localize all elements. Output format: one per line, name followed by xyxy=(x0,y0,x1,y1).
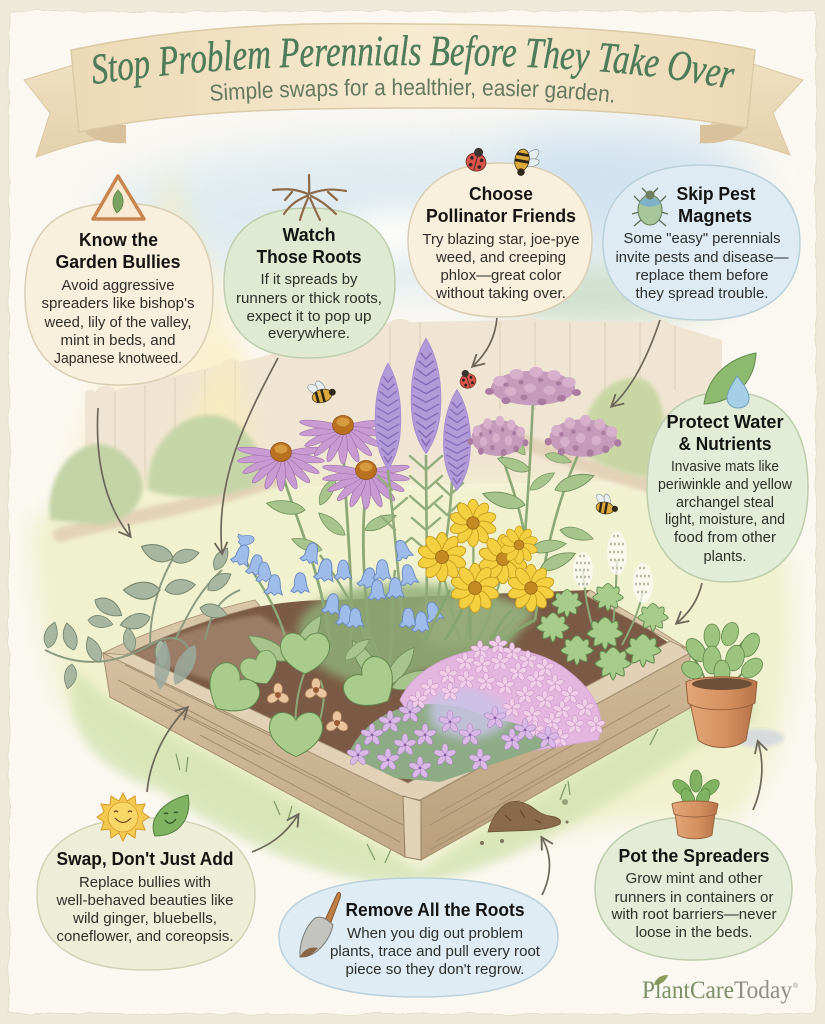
icon: trowel xyxy=(300,892,341,957)
panel: Protect Water and Nutrients: Invasive mats like xyxy=(671,459,779,475)
plant: coreopsis xyxy=(417,499,555,640)
panel: Watch Those Roots: everywhere. xyxy=(268,326,350,342)
background lawn xyxy=(30,476,793,870)
plant: blazing star spikes xyxy=(375,338,470,630)
panel: Pot the Spreaders: Grow mint and other xyxy=(626,871,763,887)
left fold xyxy=(80,120,126,143)
raised bed xyxy=(103,590,690,860)
icon: small potted plant xyxy=(670,770,722,839)
logo: PlantCareToday: ® xyxy=(793,982,799,990)
logo: PlantCareToday: PlantCareToday xyxy=(642,977,792,1004)
right fold xyxy=(700,120,747,143)
title: Stop Problem Perennials Before They Take Over xyxy=(93,35,735,88)
panel: Pot the Spreaders: runners in containers or xyxy=(614,890,774,906)
panel: Protect Water and Nutrients: & Nutrients xyxy=(678,434,772,454)
subtitle: Simple swaps for a healthier, easier garden. xyxy=(210,78,614,104)
panel: Swap, Don't Just Add: well-behaved beauties like xyxy=(55,893,233,909)
panel: Pot the Spreaders: Pot the Spreaders xyxy=(618,846,770,866)
panel: Swap, Don't Just Add: wild ginger, bluebells, xyxy=(72,911,217,927)
panel: Choose Pollinator Friends xyxy=(408,144,592,317)
panel: Choose Pollinator Friends: Try blazing star, joe-pye xyxy=(422,232,580,248)
icon: warning triangle with leaf xyxy=(93,176,144,219)
panel: Know the Garden Bullies: weed, lily of the valley, xyxy=(43,315,191,331)
panel: Protect Water and Nutrients: archangel steal xyxy=(676,495,774,511)
grass around bed xyxy=(71,670,784,885)
main band xyxy=(71,23,755,132)
icon: smiling leaf xyxy=(153,795,189,836)
arrows xyxy=(97,318,762,895)
icon: beetle xyxy=(632,188,668,226)
panel: Know the Garden Bullies xyxy=(25,176,213,385)
icon: smiling sun xyxy=(97,793,149,841)
insects in garden xyxy=(304,367,620,516)
panel: Remove All the Roots: piece so they don't regrow. xyxy=(346,962,524,978)
panel: Watch Those Roots: expect it to pop up xyxy=(246,309,372,325)
watercolor sky xyxy=(60,125,760,500)
background shrubs xyxy=(49,378,665,525)
panel: Protect Water and Nutrients: Protect Water xyxy=(666,412,784,432)
plant: bluebells xyxy=(230,532,444,694)
soil xyxy=(125,590,672,785)
panel: Skip Pest Magnets: Magnets xyxy=(678,206,752,226)
panel: Swap, Don't Just Add: Swap, Don't Just Add xyxy=(56,849,234,869)
panel: Choose Pollinator Friends: Choose xyxy=(469,184,533,204)
right face xyxy=(421,653,690,860)
panel: Remove All the Roots: Remove All the Roots xyxy=(346,900,524,920)
panel: Skip Pest Magnets: Skip Pest xyxy=(676,184,756,204)
fence xyxy=(85,317,722,500)
right tail xyxy=(700,63,803,155)
panel: Know the Garden Bullies: Avoid aggressive xyxy=(62,278,174,294)
panel: Protect Water and Nutrients xyxy=(647,353,808,582)
rim top xyxy=(103,640,690,800)
panel: Choose Pollinator Friends: phlox—great color xyxy=(440,268,562,284)
panel: Skip Pest Magnets: invite pests and disease— xyxy=(616,250,789,266)
plant: foamflower xyxy=(537,531,668,680)
panel: Know the Garden Bullies: Know the xyxy=(79,230,158,250)
panel: Swap, Don't Just Add: coneflower, and coreopsis. xyxy=(56,929,233,945)
panel: Watch Those Roots: runners or thick roots, xyxy=(236,291,382,307)
panel: Swap, Don't Just Add xyxy=(37,793,255,970)
icon: roots xyxy=(273,175,346,220)
panel: Know the Garden Bullies: spreaders like bishop's xyxy=(42,296,194,312)
plant: wild ginger xyxy=(196,633,407,757)
dirt mound xyxy=(480,799,568,845)
terracotta pot with mint xyxy=(678,620,766,748)
panel: Watch Those Roots: If it spreads by xyxy=(260,272,358,288)
icon: ladybug xyxy=(464,145,489,173)
panel: Pot the Spreaders xyxy=(595,770,792,960)
panel: Watch Those Roots xyxy=(224,175,395,358)
soil path band xyxy=(60,440,670,535)
panel: Know the Garden Bullies: Garden Bullies xyxy=(56,252,180,272)
panel: Know the Garden Bullies: mint in beds, and xyxy=(60,333,176,349)
panel: Choose Pollinator Friends: Pollinator Friends xyxy=(426,206,576,226)
panel: Skip Pest Magnets: they spread trouble. xyxy=(636,286,768,302)
panel: Pot the Spreaders: loose in the beds. xyxy=(636,925,752,941)
panel: Know the Garden Bullies: Japanese knotweed. xyxy=(54,351,182,367)
panel: Protect Water and Nutrients: light, moisture, and xyxy=(665,512,785,528)
panel: Watch Those Roots: Watch xyxy=(282,225,336,245)
left tail xyxy=(24,63,126,157)
icon: leaf and water drop xyxy=(704,353,756,408)
plant: coneflowers xyxy=(237,416,410,660)
banner ribbon xyxy=(23,22,804,158)
foliage mass behind plants xyxy=(297,583,535,683)
icon: bee xyxy=(512,144,543,179)
panel: Remove All the Roots: plants, trace and pull every root xyxy=(330,944,540,960)
panel: Remove All the Roots: When you dig out problem xyxy=(347,926,523,942)
plant: creeping phlox xyxy=(346,636,606,782)
panel: Pot the Spreaders: with root barriers—never xyxy=(610,907,777,923)
panel: Choose Pollinator Friends: weed, and creeping xyxy=(435,250,566,266)
back rim xyxy=(103,590,690,655)
panel: Remove All the Roots xyxy=(279,878,558,997)
panel: Choose Pollinator Friends: without taking over. xyxy=(435,286,566,302)
left face xyxy=(103,653,405,857)
panel: Protect Water and Nutrients: plants. xyxy=(704,549,746,565)
plant: joe-pye weed xyxy=(468,367,621,620)
plant: invasive weed xyxy=(41,540,240,690)
panel: Protect Water and Nutrients: food from other xyxy=(674,530,776,546)
panel: Swap, Don't Just Add: Replace bullies with xyxy=(79,875,211,891)
panel: Skip Pest Magnets xyxy=(603,165,800,320)
panel: Skip Pest Magnets: replace them before xyxy=(636,268,768,284)
front post xyxy=(403,796,421,860)
panel: Skip Pest Magnets: Some "easy" perennials xyxy=(624,231,780,247)
panel: Watch Those Roots: Those Roots xyxy=(256,247,362,267)
panel: Protect Water and Nutrients: periwinkle and yellow xyxy=(658,477,793,493)
